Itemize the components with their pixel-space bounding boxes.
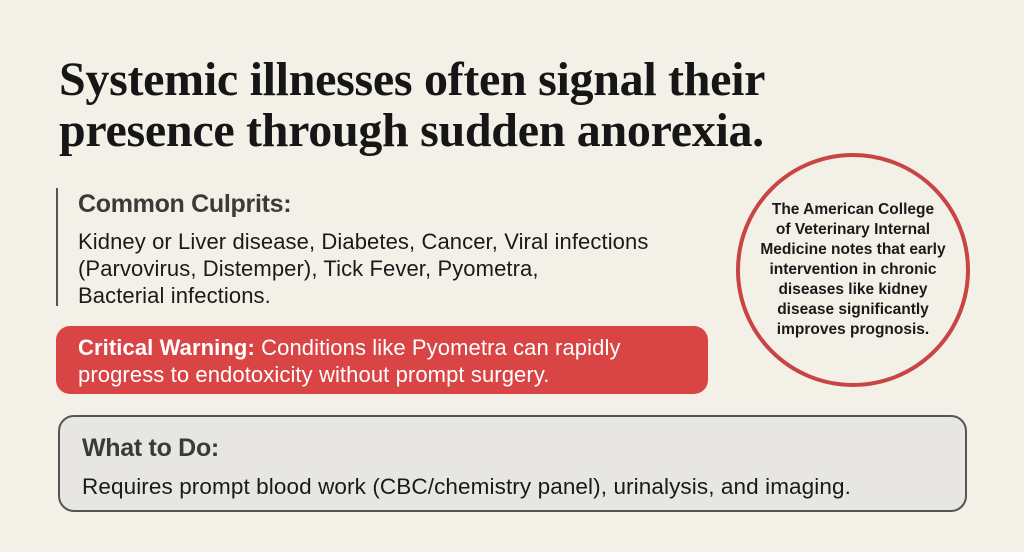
title: Systemic illnesses often signal their (59, 53, 765, 106)
heading: common culprits: Common Culprits: (78, 190, 291, 218)
text: culprits list (78, 229, 648, 308)
callout: critical warning: Critical Warning: Conditions like Pyometra can rapidly (78, 335, 621, 360)
panel: what to do (58, 415, 967, 512)
callout: critical warning (56, 326, 708, 394)
title: presence through sudden anorexia. (59, 104, 764, 157)
text: culprits list: Bacterial infections. (78, 283, 271, 308)
text: what to do: Requires prompt blood work (CBC/chemistry panel), urinalysis, and imaging. (82, 474, 851, 499)
panel: common culprits (56, 188, 698, 306)
callout circle: ACVIM note (736, 153, 970, 387)
text: culprits list: (Parvovirus, Distemper), Tick Fever, Pyometra, (78, 256, 539, 281)
callout: critical warning: progress to endotoxicity without prompt surgery. (78, 362, 550, 387)
title (59, 53, 765, 157)
heading: what to do: What to Do: (82, 434, 219, 462)
text: culprits list: Kidney or Liver disease, Diabetes, Cancer, Viral infections (78, 229, 648, 254)
callout circle: ACVIM note: The American College (772, 201, 934, 218)
callout circle: ACVIM note: of Veterinary Internal Medicine notes that early intervention in chronic diseases like kidney disease significantly improves prognosis. (760, 221, 946, 338)
